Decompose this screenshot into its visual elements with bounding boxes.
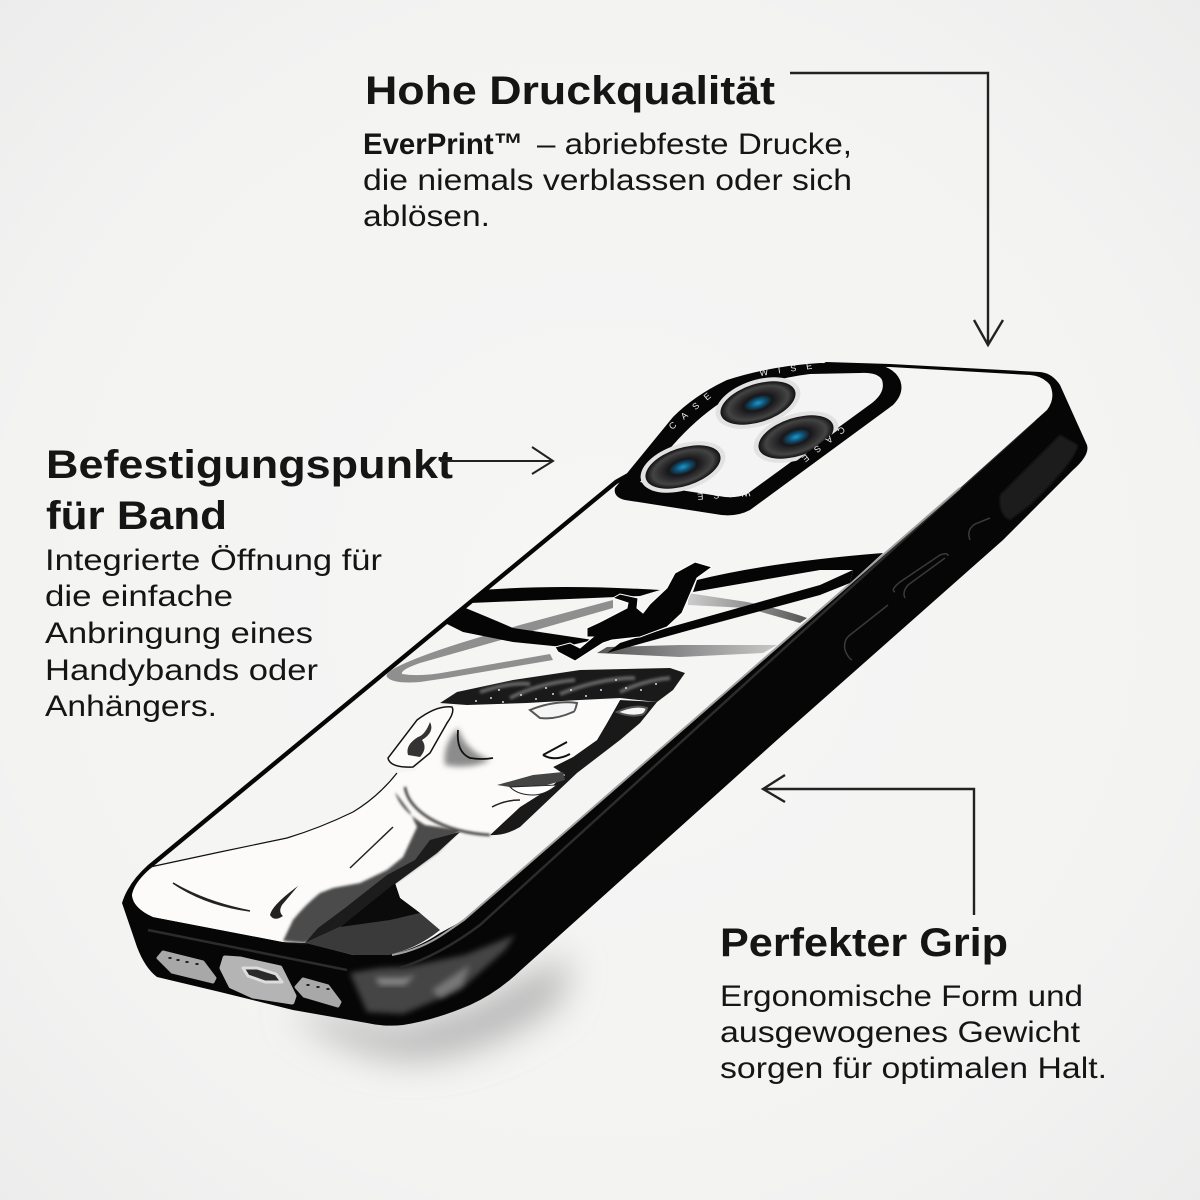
- figure: [555, 562, 712, 661]
- dark side of face: [490, 700, 657, 835]
- camera glass: [640, 373, 883, 497]
- body: Handybands oder: [45, 654, 318, 687]
- case body: [122, 362, 1087, 1026]
- back panel: [132, 366, 1052, 955]
- arrow: [440, 447, 553, 474]
- callout: print quality: [363, 69, 1003, 345]
- body: Anhängers.: [45, 690, 217, 723]
- phone case: [122, 359, 1087, 1026]
- body: – abriebfeste Drucke,: [537, 128, 852, 161]
- body: die einfache: [45, 580, 233, 613]
- grey halo left: [387, 600, 613, 682]
- brand text: WISE: [687, 488, 751, 502]
- charge port: [222, 958, 294, 1002]
- body: Ergonomische Form und: [720, 980, 1083, 1013]
- arrow: [790, 73, 1003, 345]
- heading: [46, 443, 453, 538]
- body: ausgewogenes Gewicht: [720, 1016, 1081, 1049]
- body: sorgen für optimalen Halt.: [720, 1052, 1107, 1085]
- bottom ports: [158, 952, 340, 1006]
- heading: Befestigungspunkt: [46, 443, 453, 487]
- artwork: neck outline: [150, 773, 397, 867]
- hair texture: [480, 678, 670, 698]
- arrow: [763, 775, 974, 915]
- body: EverPrint™: [363, 128, 523, 161]
- side buttons: [845, 518, 990, 660]
- body: ablösen.: [363, 200, 490, 233]
- brand text: [667, 359, 847, 502]
- camera frame right edge: [748, 398, 890, 504]
- body: Anbringung eines: [45, 617, 313, 650]
- brand text: CASE: [667, 385, 720, 432]
- right speaker: [296, 979, 340, 1006]
- corner highlight: [350, 935, 515, 1014]
- mouth: [497, 772, 565, 787]
- body: [363, 128, 852, 233]
- cheek shadow: [445, 728, 490, 767]
- brand text: WISE: [759, 359, 823, 378]
- left speaker: [158, 952, 215, 982]
- brand text: CASE: [793, 424, 847, 470]
- artwork: head: [388, 668, 685, 835]
- nose: [543, 742, 570, 758]
- heading: Perfekter Grip: [720, 921, 1008, 965]
- eyes: [530, 702, 577, 718]
- side seam: [148, 420, 1035, 970]
- hair speckle: [475, 680, 657, 702]
- body: [45, 544, 382, 723]
- artwork: shoulder and neck: [132, 770, 470, 943]
- body: die niemals verblassen oder sich: [363, 164, 852, 197]
- camera module: [615, 359, 901, 515]
- heading: für Band: [46, 494, 227, 538]
- artwork: shirt: [305, 883, 440, 955]
- artwork: neck dark edge: [305, 832, 460, 943]
- panel bevel: [392, 488, 960, 955]
- callout: grip: [720, 775, 1107, 1085]
- body: [720, 980, 1107, 1085]
- charge port opening: [243, 968, 282, 982]
- heading: Hohe Druckqualität: [365, 69, 775, 113]
- camera frame: [615, 363, 901, 515]
- body: Integrierte Öffnung für: [45, 544, 382, 577]
- artwork: rings and figure: [387, 553, 883, 682]
- grey ring right: [688, 593, 807, 623]
- lenses: [709, 368, 807, 438]
- hair: [440, 668, 685, 705]
- ear: [388, 707, 453, 767]
- artwork: shoulder strokes: [173, 827, 393, 919]
- black ring: [470, 587, 660, 603]
- phone shadow: [290, 955, 570, 1058]
- artwork: neck shading: [283, 792, 460, 943]
- jaw outline shade: [405, 787, 490, 835]
- face: [405, 700, 620, 835]
- callout: strap attachment: [45, 443, 553, 723]
- side sheen: [1000, 435, 1078, 520]
